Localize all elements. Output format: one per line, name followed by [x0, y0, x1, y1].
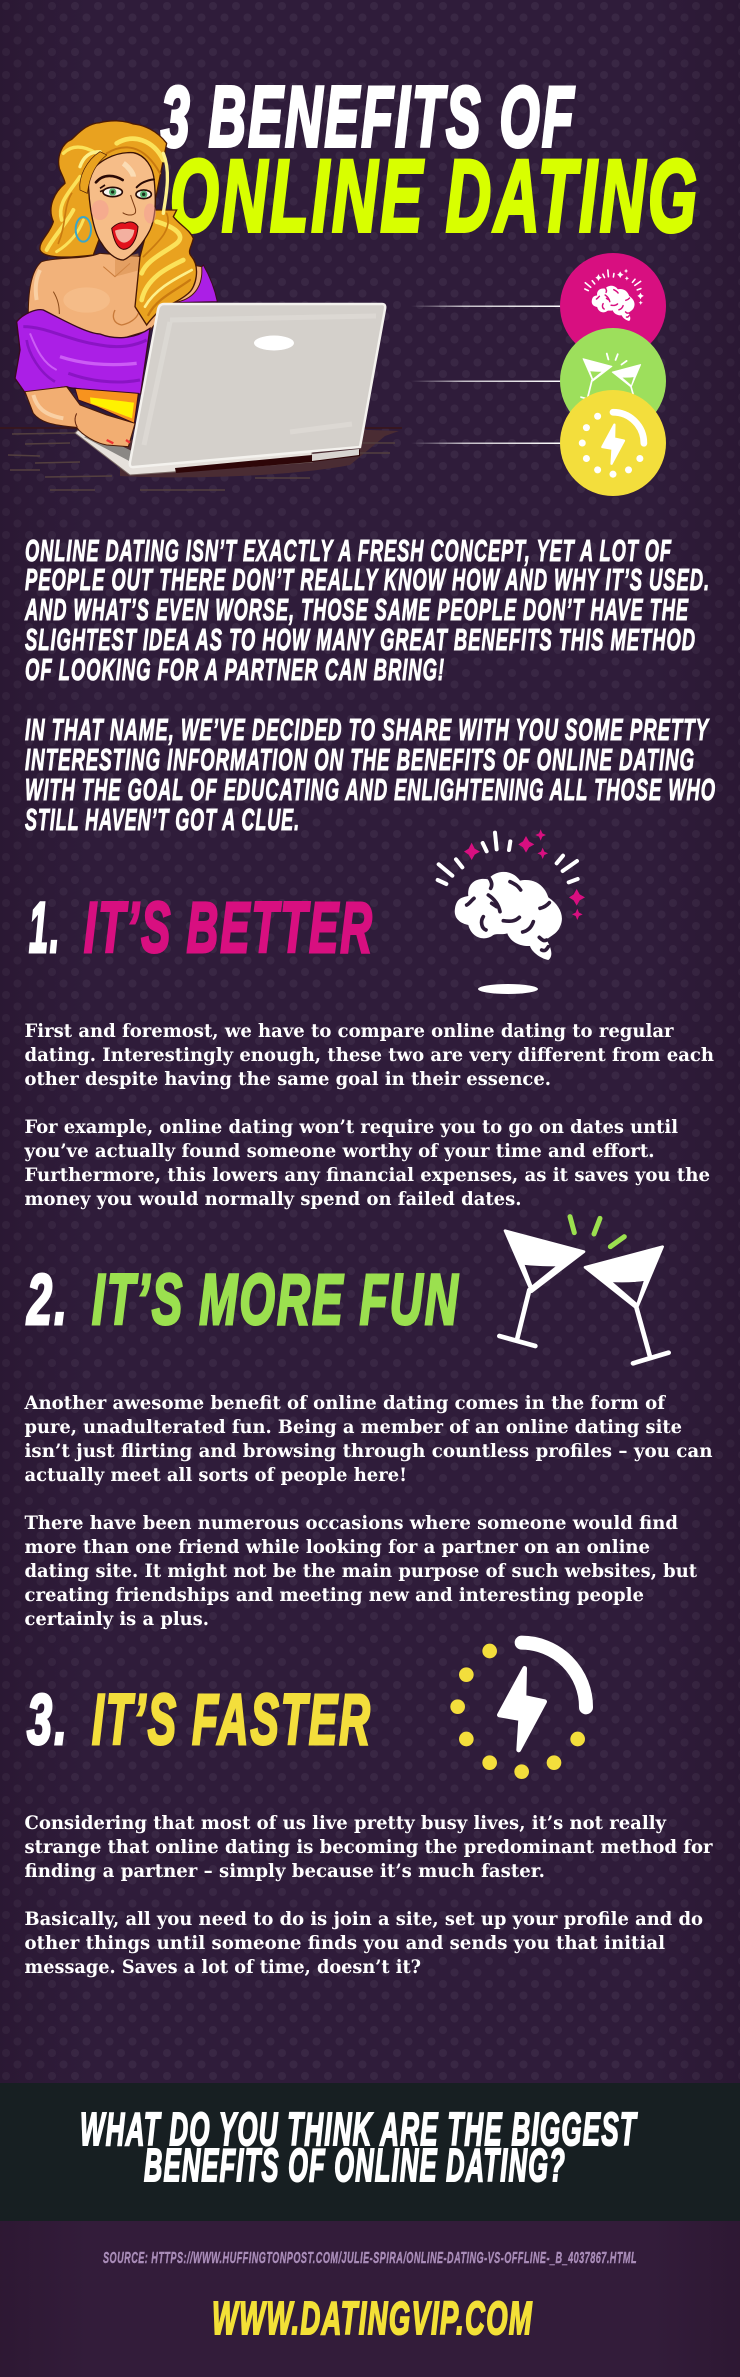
panel: footer [0, 2221, 740, 2377]
section 2 text: dating site. It might not be the main purpose of such websites, but [24, 1561, 697, 1582]
section 3 text [24, 1813, 713, 1978]
section 1 heading [29, 889, 374, 968]
section 1 text [24, 1021, 715, 1210]
chest shading [36, 253, 140, 325]
arm and hand [25, 387, 135, 447]
icon: brain [438, 829, 585, 994]
hair back [40, 121, 196, 325]
section 2 text: actually meet all sorts of people here! [24, 1465, 407, 1486]
earring [76, 217, 91, 242]
icon: lightning speed [450, 1643, 586, 1779]
torso [28, 253, 202, 340]
section 3 heading: IT’S FASTER [92, 1681, 372, 1760]
section 1 heading: IT’S BETTER [84, 889, 374, 968]
face shading [91, 163, 156, 223]
nose [123, 195, 136, 215]
section 1 heading: 1. [29, 889, 61, 968]
section 1 text: For example, online dating won’t require you to go on dates until [24, 1117, 678, 1138]
section 3 text: other things until someone finds you and sends you that initial [24, 1933, 665, 1954]
panel: question band [0, 2083, 740, 2221]
right sleeve [173, 265, 217, 303]
title [161, 70, 700, 253]
section 3 text: Considering that most of us live pretty busy lives, it’s not really [24, 1813, 667, 1834]
intro paragraphs: OF LOOKING FOR A PARTNER CAN BRING! [25, 652, 445, 687]
icon: brain badge [560, 253, 666, 359]
section 3 heading: 3. [27, 1681, 69, 1760]
section 1 text: dating. Interestingly enough, these two are very different from each [24, 1045, 715, 1066]
section 2 text: more than one friend while looking for a partner on an online [24, 1537, 650, 1558]
desk shadow [0, 428, 402, 490]
arm details [33, 395, 130, 443]
section 3 text: finding a partner – simply because it’s much faster. [24, 1861, 545, 1882]
section 2 heading [26, 1261, 460, 1340]
section 2 text: creating friendships and meeting new and interesting people [24, 1585, 644, 1606]
icon: speed badge [560, 390, 666, 496]
section 2 text: Another awesome benefit of online dating comes in the form of [24, 1393, 666, 1414]
face [88, 153, 155, 260]
section 3 text: Basically, all you need to do is join a site, set up your profile and do [24, 1909, 703, 1930]
section 1 text: money you would normally spend on failed dates. [24, 1189, 522, 1210]
section 3 heading [27, 1681, 372, 1760]
intro paragraphs [24, 533, 716, 837]
front hair strands [80, 152, 107, 193]
section 2 text: isn’t just flirting and browsing through countless profiles – you can [24, 1441, 713, 1462]
intro paragraphs: STILL HAVEN’T GOT A CLUE. [25, 802, 300, 837]
eyes and brows [96, 176, 154, 199]
icon: cocktail glasses [499, 1217, 669, 1363]
section 2 heading: IT’S MORE FUN [92, 1261, 460, 1340]
section 2 text: certainly is a plus. [24, 1609, 209, 1630]
question text [80, 2103, 638, 2191]
section 1 text: other despite having the same goal in their essence. [24, 1069, 551, 1090]
section 2 text: pure, unadulterated fun. Being a member of an online dating site [24, 1417, 682, 1438]
section 1 text: you’ve actually found someone worthy of your time and effort. [24, 1141, 655, 1162]
hair highlights [47, 139, 192, 315]
laptop lid [130, 304, 385, 467]
top folds [23, 327, 147, 382]
woman [15, 121, 217, 447]
section 2 heading: 2. [26, 1261, 69, 1340]
connector lines [411, 306, 561, 444]
laptop base [75, 430, 360, 475]
laptop highlights [144, 316, 376, 445]
section 3 text: strange that online dating is becoming the predominant method for [24, 1837, 713, 1858]
icon: glasses badge [560, 328, 666, 434]
website: WWW.DATINGVIP.COM [212, 2292, 533, 2344]
laptop logo [254, 336, 294, 350]
section 2 text: There have been numerous occasions where someone would find [24, 1513, 678, 1534]
illustration: woman with laptop [0, 121, 402, 490]
section 1 text: Furthermore, this lowers any financial expenses, as it saves you the [24, 1165, 710, 1186]
mouth [112, 222, 138, 249]
section 2 text [24, 1393, 713, 1630]
purple top [15, 310, 150, 394]
circle icons [560, 253, 666, 496]
section 1 text: First and foremost, we have to compare online dating to regular [24, 1021, 674, 1042]
section 3 text: message. Saves a lot of time, doesn’t it? [24, 1957, 421, 1978]
belt [75, 388, 138, 423]
